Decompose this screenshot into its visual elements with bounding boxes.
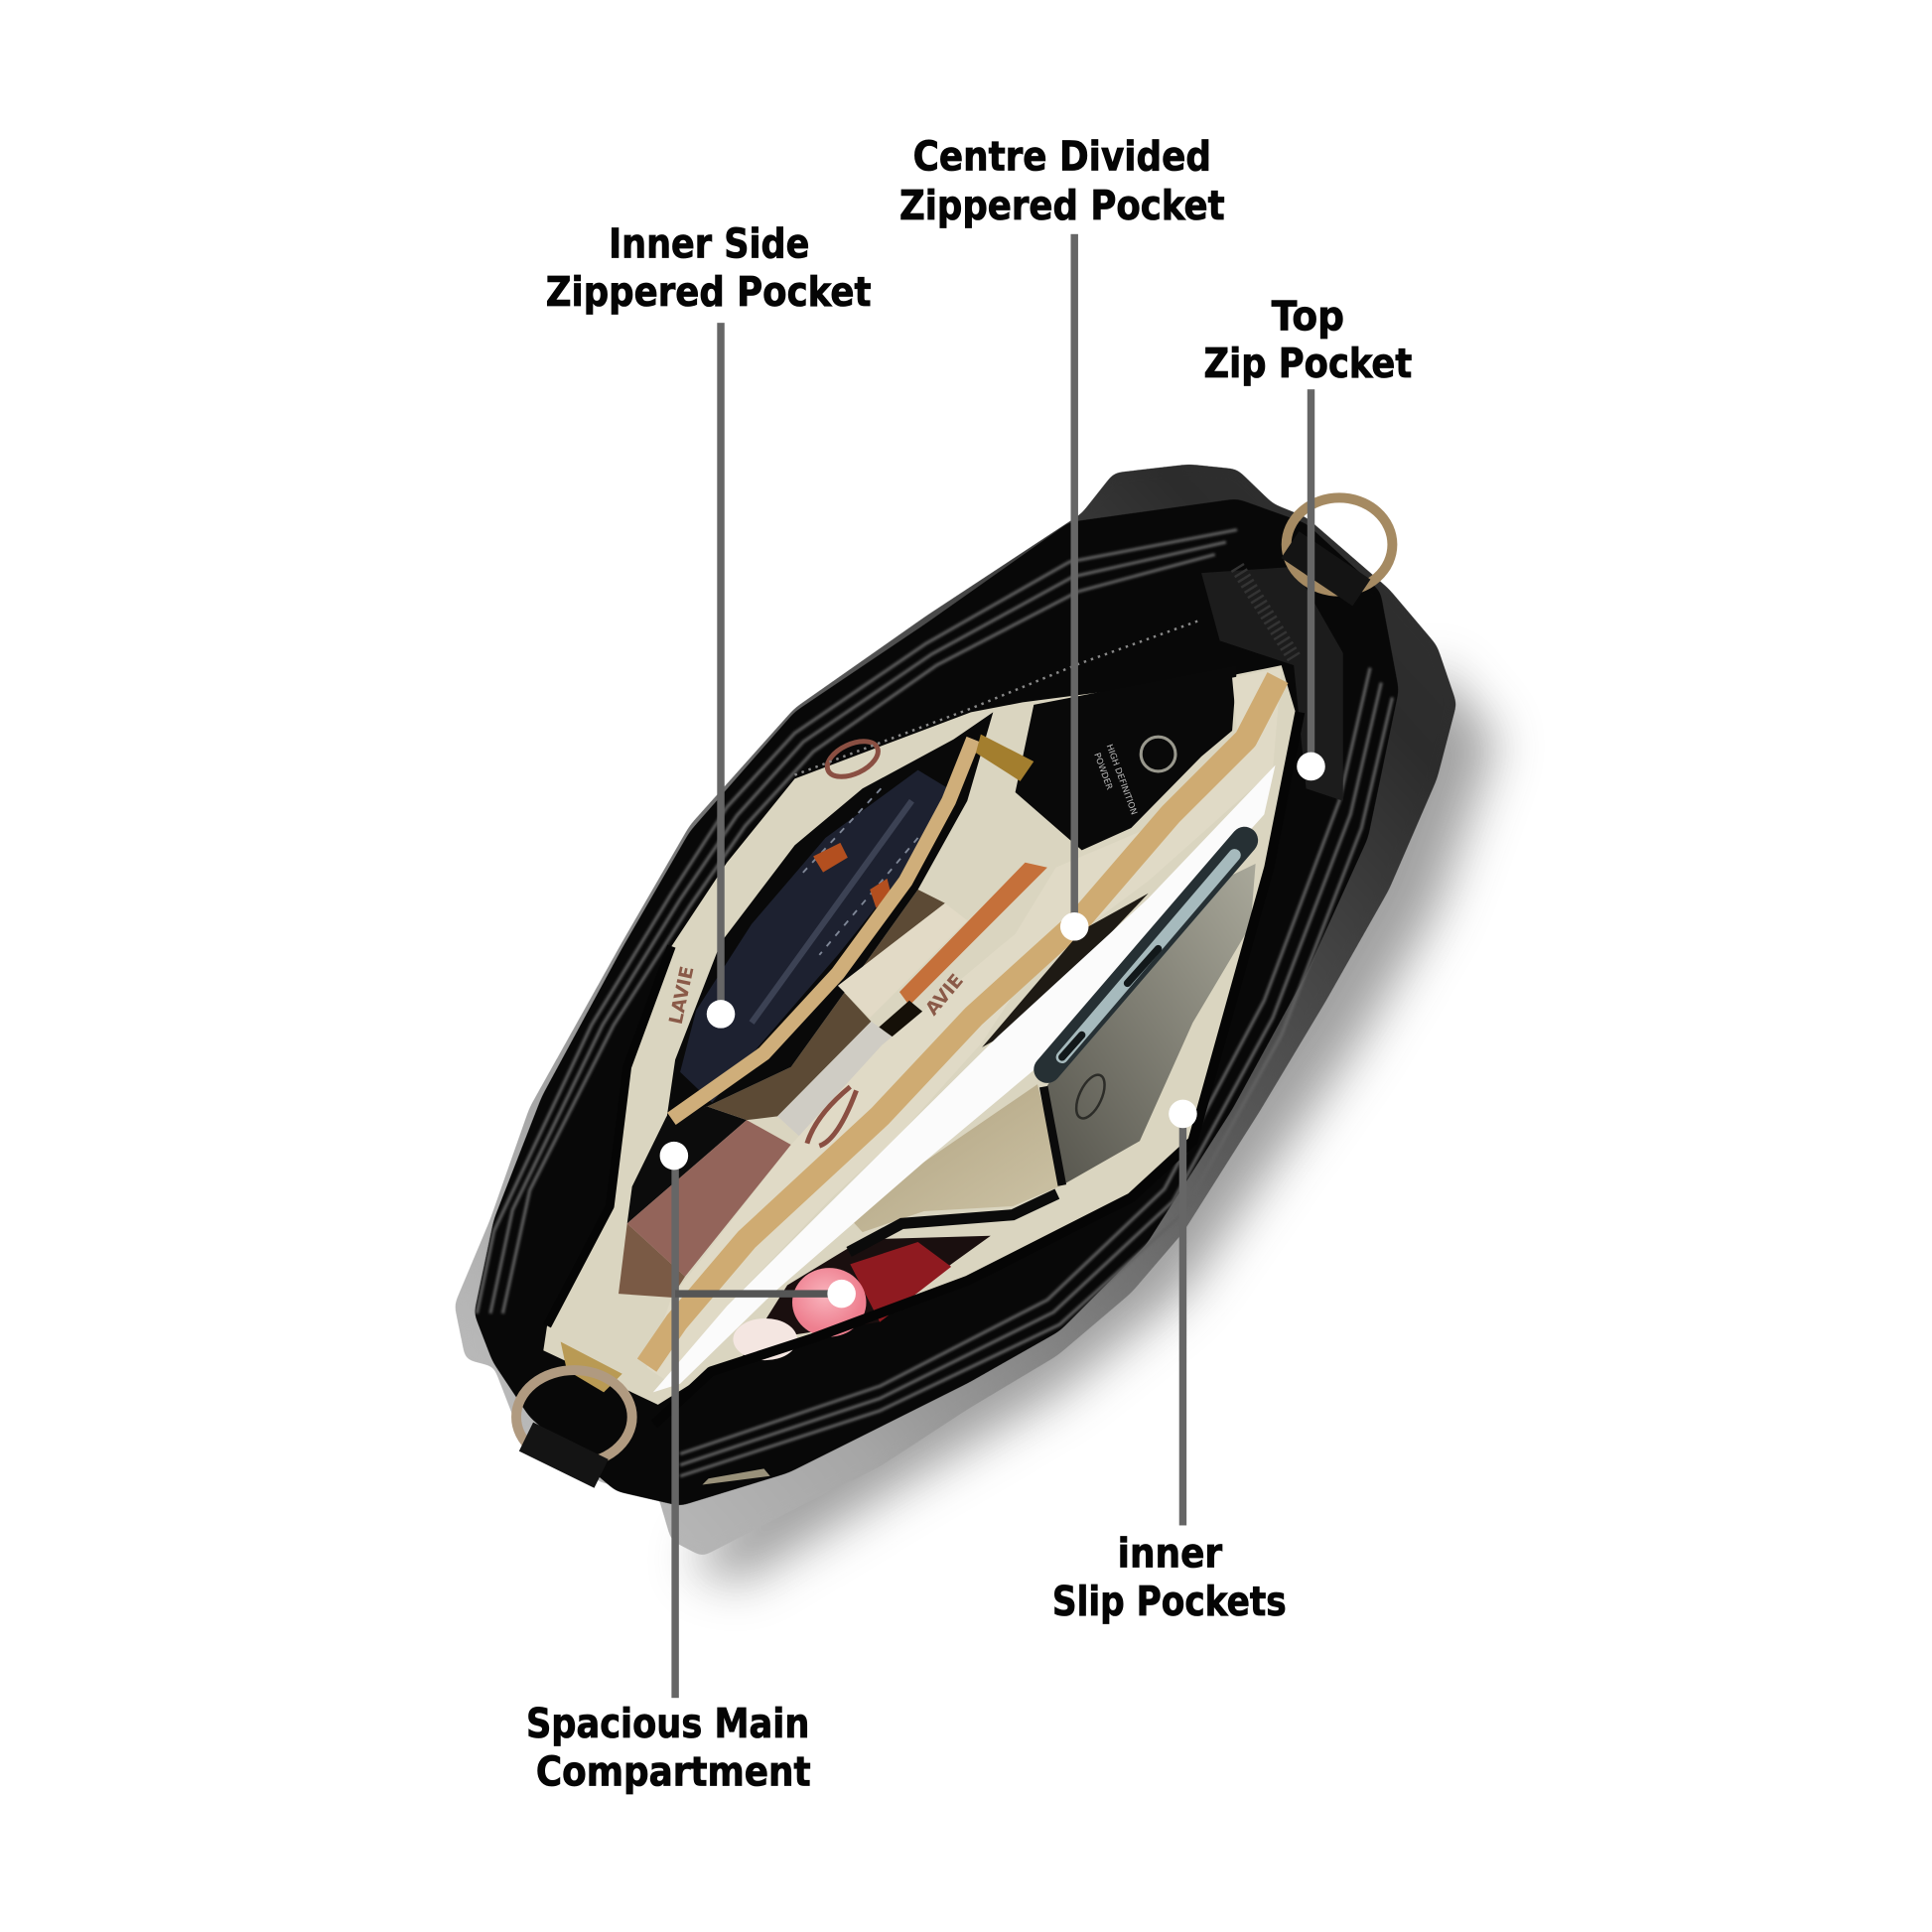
wallet orange tabs: [813, 843, 891, 908]
label: [546, 219, 871, 316]
brown shade: [619, 1223, 685, 1298]
outer bag shell: [455, 465, 1456, 1556]
label: Centre Divided: [913, 132, 1211, 180]
leader line: [1070, 234, 1078, 926]
dot: [1297, 753, 1325, 780]
orange cosmetic box: [899, 863, 1047, 1006]
leader line: [671, 1156, 679, 1698]
brown compact: [627, 1120, 791, 1277]
inner side pocket: [666, 712, 1034, 1119]
gold zip pull: [976, 735, 1034, 781]
red lipstick body: [850, 1242, 951, 1322]
label: Zip Pocket: [1204, 340, 1412, 387]
bottom ring: [516, 1370, 632, 1463]
leader line: [1308, 389, 1314, 766]
black left triangle: [627, 1106, 747, 1223]
top zipper: [794, 620, 1201, 775]
label: Compartment: [536, 1747, 811, 1795]
divider wordmark: AVIE: [921, 970, 968, 1020]
label: Zippered Pocket: [546, 268, 871, 316]
rim highlights: [477, 530, 1392, 1476]
vertical zipper: [1237, 567, 1295, 659]
white cap: [733, 1318, 797, 1360]
dot: [1169, 1100, 1197, 1128]
grey pocket: [1044, 864, 1256, 1185]
label: [1204, 293, 1412, 387]
phone ports: [1062, 949, 1159, 1057]
slip pocket with phone: [1043, 840, 1256, 1185]
top ring: [1287, 497, 1392, 592]
label: [899, 132, 1225, 229]
cream lining: [543, 665, 1297, 1405]
label: [526, 1700, 811, 1795]
bag drop shadow: [690, 665, 1497, 1584]
patterned box: [777, 1022, 894, 1141]
lower zip pull: [561, 1342, 622, 1392]
dot: [707, 1000, 735, 1029]
herringbone zip fabric: [1201, 567, 1343, 801]
main zipper edges: [547, 712, 1300, 1425]
label: Zippered Pocket: [899, 182, 1225, 229]
lower compartment dark: [740, 1236, 991, 1361]
label: [1052, 1530, 1287, 1625]
callout: spacious main compartment: [526, 1142, 856, 1795]
phone edge: [1047, 840, 1244, 1069]
callout: centre divided zippered pocket: [899, 132, 1225, 941]
pink lipstick cap: [792, 1268, 866, 1337]
dot upper: [660, 1142, 688, 1170]
label: Top: [1272, 293, 1344, 341]
callout: top zip pocket: [1204, 293, 1412, 780]
beige lower pocket: [835, 1084, 1062, 1232]
label: Spacious Main: [526, 1700, 809, 1747]
top strap: [1290, 545, 1361, 593]
inner loop strap: [849, 1194, 1057, 1252]
centre divider fabric: [647, 668, 1282, 1380]
divider logo: [807, 1087, 857, 1146]
label: Inner Side: [609, 219, 809, 267]
label: inner: [1118, 1530, 1223, 1578]
cream box: [838, 903, 967, 1018]
navy wallet: [680, 770, 959, 1103]
bottom strap: [526, 1437, 602, 1473]
fabric logo upper: [822, 734, 884, 784]
wallet stitches: [801, 788, 918, 955]
wallet seam: [752, 801, 911, 1023]
fabric wordmark left: LAVIE: [666, 964, 698, 1027]
dot lower: [827, 1280, 856, 1308]
white panel: [653, 765, 1276, 1392]
cosmetic jar: POWDER: [1091, 752, 1114, 791]
horizontal branch: [675, 1290, 842, 1298]
brown shade behind boxes: [707, 890, 945, 1120]
dark gap under divider: [982, 894, 1149, 1047]
dot: [1060, 912, 1088, 941]
cosmetic jar: HIGH DEFINITION: [1104, 743, 1139, 816]
leader line: [717, 323, 725, 1014]
label: Slip Pockets: [1052, 1578, 1287, 1625]
pocket logo: [1070, 1070, 1110, 1123]
leader line: [1179, 1114, 1186, 1525]
handbag: [455, 465, 1497, 1584]
callout: inner slip pockets: [1052, 1100, 1287, 1625]
callout: inner side zippered pocket: [546, 219, 871, 1029]
pocket backing: [666, 712, 993, 1119]
centre zipper: [647, 678, 1278, 1365]
pocket zipper: [671, 740, 973, 1119]
base slit: [702, 1468, 770, 1484]
black rim: [475, 499, 1399, 1506]
cosmetic jar: [1016, 665, 1237, 850]
pocket strap: [1043, 1087, 1062, 1185]
dark box gap: [879, 1001, 924, 1037]
